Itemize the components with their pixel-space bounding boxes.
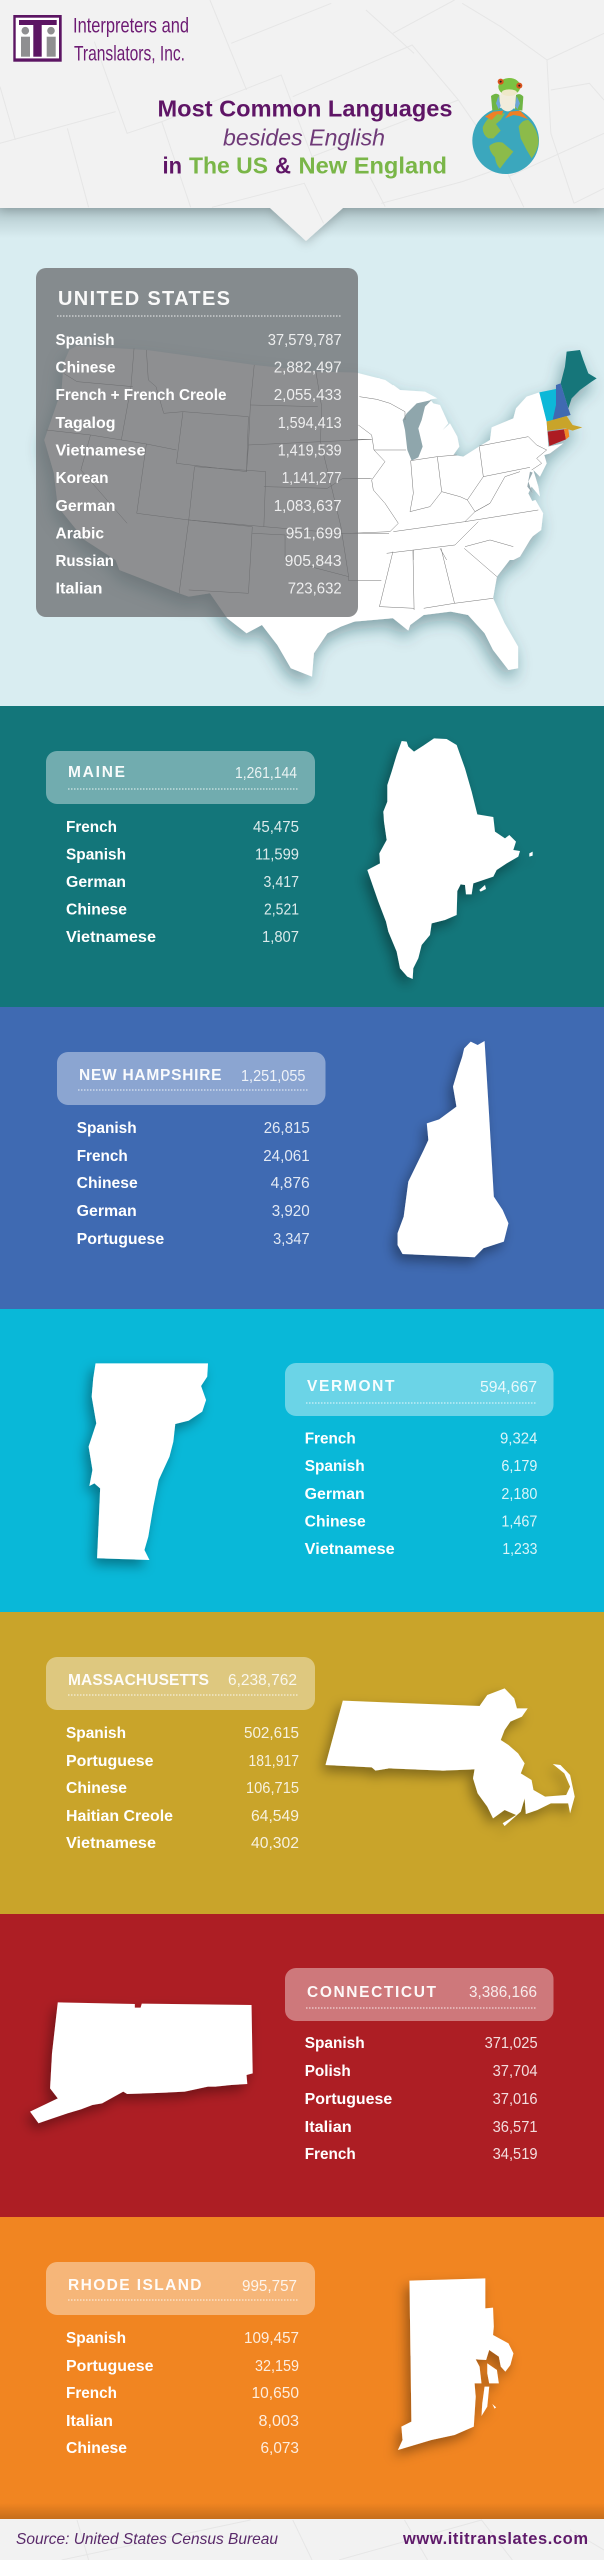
New Hampshire heading: 1,251,055	[241, 1068, 306, 1085]
New Hampshire rows: Chinese	[77, 1175, 138, 1192]
New Hampshire rows	[77, 1120, 310, 1248]
Vermont rows: Vietnamese	[305, 1541, 395, 1558]
New England: Vermont	[539, 389, 557, 421]
Connecticut rows: Portuguese	[305, 2091, 393, 2108]
Massachusetts rows: 106,715	[246, 1780, 299, 1797]
footer	[0, 2519, 604, 2560]
rows: US languages: Italian	[56, 581, 102, 598]
panel: Vermont	[0, 1309, 604, 1612]
rows: US languages: Chinese	[56, 360, 116, 377]
Chesapeake Bay	[527, 472, 533, 493]
map: Rhode Island	[398, 2278, 513, 2450]
Vermont rows: 2,180	[501, 1486, 538, 1503]
map: New Hampshire	[398, 1041, 508, 1257]
panel: United States table	[36, 268, 358, 617]
Vermont heading: 594,667	[480, 1379, 537, 1396]
Connecticut rows: 34,519	[493, 2146, 538, 2163]
company name: Interpreters and	[73, 14, 189, 38]
Massachusetts rows: 64,549	[251, 1808, 299, 1825]
Connecticut rows: 37,016	[493, 2091, 538, 2108]
Massachusetts rows: 181,917	[248, 1753, 299, 1770]
Massachusetts rows: Portuguese	[66, 1753, 154, 1770]
New Hampshire rows: French	[77, 1148, 128, 1165]
source note: Source: United States Census Bureau	[16, 2531, 278, 2548]
panel: Maine	[0, 706, 604, 1007]
map: Maine	[367, 738, 533, 979]
Connecticut heading	[285, 1968, 554, 2021]
New England: New Hampshire	[553, 383, 571, 420]
Maine rows	[66, 819, 299, 946]
title: besides English	[223, 125, 385, 151]
Lake Michigan	[403, 400, 432, 461]
Vermont rows: 9,324	[500, 1431, 538, 1448]
title: The US	[189, 152, 268, 178]
Maine rows: 3,417	[264, 874, 299, 891]
Maine heading	[46, 751, 315, 804]
state lines: east	[350, 397, 547, 560]
Rhode Island rows: 32,159	[255, 2358, 299, 2375]
Massachusetts heading	[46, 1657, 315, 1710]
Connecticut rows: Spanish	[305, 2035, 365, 2052]
New Hampshire rows: Portuguese	[77, 1231, 165, 1248]
New Hampshire rows: 4,876	[271, 1175, 310, 1192]
Vermont rows: German	[305, 1486, 365, 1503]
Massachusetts rows: Haitian Creole	[66, 1808, 173, 1825]
Massachusetts rows: Spanish	[66, 1725, 126, 1742]
rows: US languages: Russian	[56, 553, 114, 570]
New Hampshire heading	[57, 1052, 326, 1105]
rows: US languages	[56, 332, 342, 598]
map: Connecticut	[30, 2002, 253, 2123]
Maine heading: 1,261,144	[235, 765, 297, 782]
company name: Translators, Inc.	[74, 42, 185, 66]
rows: US languages: German	[56, 498, 116, 515]
Rhode Island rows: 10,650	[252, 2385, 299, 2402]
Connecticut rows	[305, 2035, 538, 2163]
rows: US languages: French + French Creole	[56, 387, 227, 404]
Rhode Island rows: Spanish	[66, 2330, 126, 2347]
Vermont heading: VERMONT	[307, 1378, 395, 1395]
Maine heading: MAINE	[68, 764, 125, 781]
Maine rows: 45,475	[253, 819, 299, 836]
Connecticut rows: 371,025	[485, 2035, 538, 2052]
panel: Connecticut	[0, 1914, 604, 2217]
rows: US languages: Arabic	[56, 526, 104, 543]
Connecticut heading: CONNECTICUT	[307, 1984, 437, 2001]
Rhode Island rows: Portuguese	[66, 2358, 154, 2375]
Massachusetts rows: Chinese	[66, 1780, 127, 1797]
Rhode Island heading	[46, 2262, 315, 2315]
Vermont rows: French	[305, 1431, 356, 1448]
panel: United States	[0, 208, 604, 706]
icon: frog on globe	[472, 78, 539, 174]
Massachusetts rows: 502,615	[244, 1725, 299, 1742]
Maine rows: Spanish	[66, 846, 126, 864]
New Hampshire rows: 3,920	[272, 1203, 310, 1220]
Vermont rows	[305, 1431, 538, 1558]
Massachusetts rows	[66, 1725, 299, 1852]
company name	[73, 14, 189, 66]
Connecticut rows: 36,571	[493, 2119, 538, 2136]
Rhode Island rows: Italian	[66, 2413, 113, 2430]
Vermont heading	[285, 1363, 554, 1416]
New Hampshire rows: 3,347	[273, 1231, 310, 1248]
map: Vermont	[89, 1363, 208, 1560]
Rhode Island rows: Chinese	[66, 2440, 127, 2457]
New Hampshire rows: 26,815	[264, 1120, 310, 1137]
Vermont rows: 6,179	[501, 1458, 537, 1475]
map: Massachusetts	[325, 1688, 575, 1826]
New England: Rhode Island	[564, 429, 569, 439]
New Hampshire rows: 24,061	[263, 1148, 310, 1165]
logo: ITI	[13, 15, 62, 62]
rows: US languages: Vietnamese	[56, 443, 146, 460]
Maine rows: 11,599	[255, 846, 299, 864]
New Hampshire heading: NEW HAMPSHIRE	[79, 1067, 222, 1084]
panel: New Hampshire	[0, 1007, 604, 1309]
heading: United States: UNITED STATES	[58, 288, 230, 310]
rows: US languages: 37,579,787	[268, 332, 342, 349]
Massachusetts rows: 40,302	[251, 1835, 299, 1852]
Maine rows: 1,807	[262, 929, 299, 946]
rows: US languages: 1,419,539	[278, 443, 342, 460]
panel: Rhode Island	[0, 2217, 604, 2519]
Maine rows: 2,521	[264, 902, 299, 918]
Massachusetts rows: Vietnamese	[66, 1835, 156, 1852]
rows: US languages: 1,083,637	[274, 498, 342, 515]
Massachusetts heading: MASSACHUSETTS	[68, 1672, 209, 1689]
Connecticut rows: Polish	[305, 2063, 351, 2080]
Connecticut rows: 37,704	[493, 2063, 538, 2080]
title: Most Common Languages	[158, 96, 452, 122]
Vermont rows: 1,467	[501, 1514, 537, 1531]
Connecticut heading: 3,386,166	[469, 1984, 537, 2001]
Rhode Island rows	[66, 2330, 299, 2457]
Connecticut rows: Italian	[305, 2119, 352, 2136]
New England: Connecticut	[548, 429, 566, 446]
Rhode Island rows: 109,457	[244, 2330, 299, 2347]
Maine rows: French	[66, 819, 117, 836]
Rhode Island heading: 995,757	[242, 2278, 297, 2295]
Maine rows: Vietnamese	[66, 929, 156, 946]
Maine rows: Chinese	[66, 902, 127, 918]
rows: US languages: 1,141,277	[282, 470, 342, 487]
panel: Massachusetts	[0, 1612, 604, 1914]
title: &	[275, 152, 291, 178]
rows: US languages: 2,882,497	[274, 360, 342, 377]
Rhode Island rows: 8,003	[258, 2413, 299, 2430]
Massachusetts heading: 6,238,762	[228, 1672, 297, 1689]
New Hampshire rows: Spanish	[77, 1120, 137, 1137]
New England: Maine	[561, 350, 597, 408]
website: www.ititranslates.com	[402, 2530, 588, 2548]
title: New England	[298, 152, 447, 178]
map: United States	[44, 346, 597, 677]
state lines: west and south	[46, 348, 497, 610]
rows: US languages: Korean	[56, 470, 108, 487]
rows: US languages: 951,699	[286, 526, 342, 543]
title	[158, 96, 452, 178]
Vermont rows: Spanish	[305, 1458, 365, 1475]
title: in	[162, 152, 182, 178]
rows: US languages: 2,055,433	[274, 387, 342, 404]
Connecticut rows: French	[305, 2146, 356, 2163]
Vermont rows: 1,233	[502, 1541, 537, 1558]
Vermont rows: Chinese	[305, 1514, 366, 1531]
Maine rows: German	[66, 874, 126, 891]
rows: US languages: 1,594,413	[278, 415, 342, 432]
header background with notch	[0, 0, 604, 241]
rows: US languages: 723,632	[288, 581, 342, 598]
rows: US languages: Spanish	[56, 332, 114, 349]
rows: US languages: 905,843	[285, 553, 342, 570]
Rhode Island rows: French	[66, 2385, 117, 2402]
New Hampshire rows: German	[77, 1203, 137, 1220]
New England: Massachusetts	[547, 416, 582, 431]
Rhode Island rows: 6,073	[260, 2440, 299, 2457]
rows: US languages: Tagalog	[56, 415, 116, 432]
Rhode Island heading: RHODE ISLAND	[68, 2277, 202, 2294]
